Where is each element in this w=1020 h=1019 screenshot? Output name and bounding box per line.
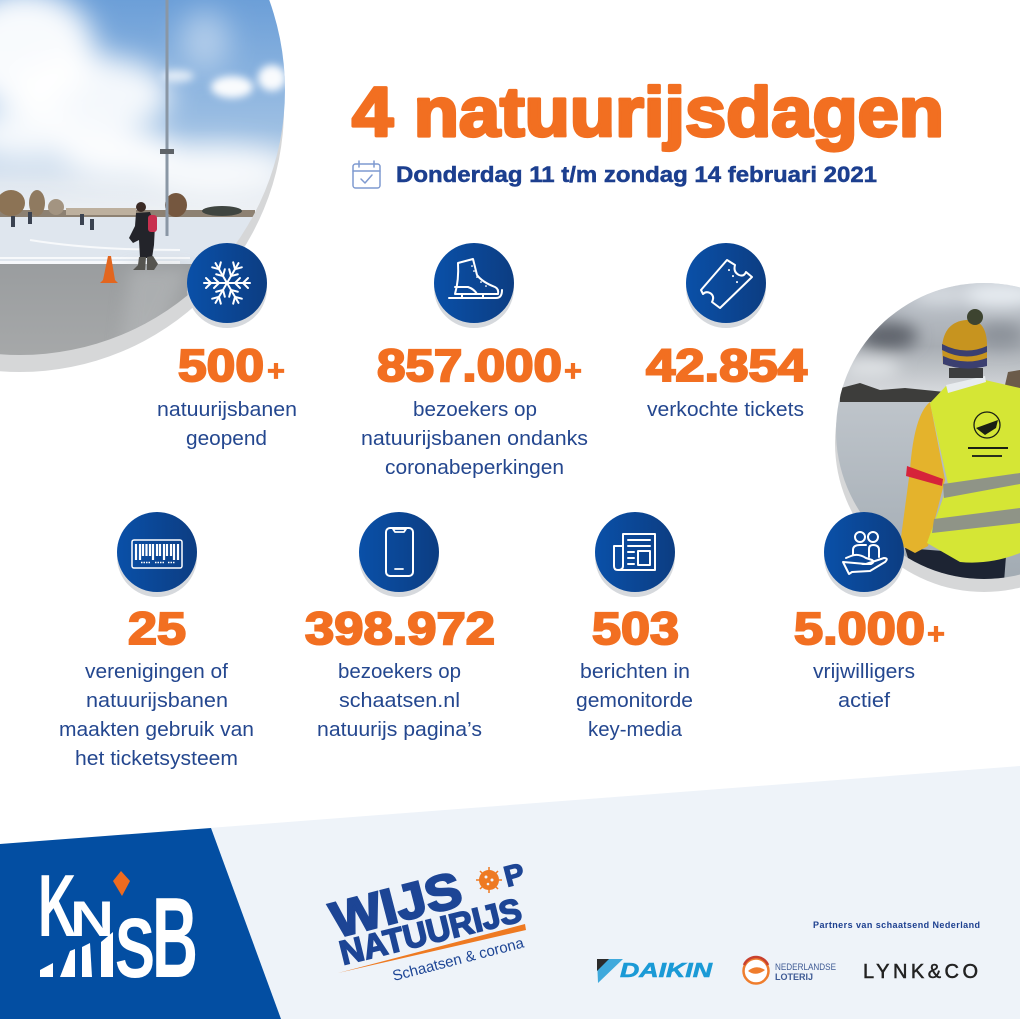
icon: smartphone xyxy=(386,528,413,576)
logo: Daikin: DAIKIN xyxy=(620,960,713,982)
stat: berichten key-media: gemonitorde xyxy=(576,690,693,712)
logo: Wijs op natuurijs: P xyxy=(501,858,528,894)
icon: snowflake xyxy=(204,262,250,304)
photo: skater on natural ice xyxy=(0,0,290,372)
stat: berichten key-media: 503 xyxy=(592,603,679,654)
stat: verkochte tickets: 42.854 xyxy=(646,340,807,391)
skaters in background xyxy=(11,212,94,230)
stat: schaatsen.nl bezoekers: 398.972 xyxy=(305,603,495,654)
stat: verkochte tickets xyxy=(646,243,807,421)
stat: natuurijsbanen geopend: natuurijsbanen xyxy=(157,399,297,421)
cone xyxy=(100,256,118,283)
icon: people in hand xyxy=(843,532,887,574)
stat: schaatsen.nl bezoekers: schaatsen.nl xyxy=(339,690,460,712)
stat: natuurijsbanen geopend: geopend xyxy=(186,428,267,450)
stat: schaatsen.nl bezoekers: bezoekers op xyxy=(338,661,461,683)
logo: Wijs op natuurijs: WIJS xyxy=(325,861,468,949)
stat: natuurijsbanen geopend: 500 xyxy=(178,340,264,391)
logo: KNSB: N xyxy=(70,891,114,947)
logo: Nederlandse Loterij: LOTERIJ xyxy=(775,972,813,983)
stat: verenigingen ticketsysteem: het ticketsysteem xyxy=(75,748,238,770)
stat: bezoekers op natuurijsbanen: + xyxy=(564,355,582,388)
stat: natuurijsbanen geopend xyxy=(157,243,297,450)
trousers xyxy=(905,548,1006,582)
footer blue panel with KNSB logo xyxy=(0,828,281,1019)
logo: KNSB: B xyxy=(152,875,198,1002)
footer background xyxy=(0,766,1020,1019)
stat: berichten key-media: berichten in xyxy=(580,661,690,683)
collar xyxy=(946,376,986,393)
stat: schaatsen.nl bezoekers xyxy=(305,512,495,741)
subtitle: dates: Donderdag 11 t/m zondag 14 februari 2021 xyxy=(396,162,877,187)
logo: Nederlandse Loterij: NEDERLANDSE xyxy=(775,962,836,973)
icon: calendar xyxy=(353,161,380,188)
logo: Nederlandse Loterij xyxy=(744,957,836,984)
stat: bezoekers op natuurijsbanen: 857.000 xyxy=(377,340,562,391)
stat: vrijwilligers: actief xyxy=(838,690,890,712)
icon: barcode xyxy=(132,540,182,568)
stat: verenigingen ticketsysteem: 25 xyxy=(128,603,186,654)
icon: ice skate xyxy=(449,259,502,298)
icon: ticket xyxy=(701,260,752,308)
logo: Daikin xyxy=(597,959,713,983)
stat: vrijwilligers xyxy=(794,512,945,712)
partners heading: Partners van schaatsend Nederland xyxy=(813,920,980,930)
stat: schaatsen.nl bezoekers: natuurijs pagina’s xyxy=(317,719,482,741)
stat: berichten key-media xyxy=(576,512,693,741)
logo: Wijs op natuurijs xyxy=(325,858,528,985)
title: 4 natuurijsdagen xyxy=(352,73,944,151)
logo: Lynk & Co: LYNK&CO xyxy=(863,961,978,983)
photo: volunteer in safety vest xyxy=(830,280,1020,598)
stat: berichten key-media: key-media xyxy=(588,719,683,741)
logo: KNSB: S xyxy=(115,901,155,995)
stat: verenigingen ticketsysteem: natuurijsbanen xyxy=(86,690,228,712)
stat: verenigingen ticketsysteem: maakten gebruik van xyxy=(59,719,254,741)
stat: verenigingen ticketsysteem xyxy=(59,512,254,770)
stat: verenigingen ticketsysteem: verenigingen of xyxy=(85,661,228,683)
stat: vrijwilligers: 5.000 xyxy=(794,603,925,654)
icon: virus xyxy=(476,867,502,893)
stat: verkochte tickets: verkochte tickets xyxy=(647,399,804,421)
hat xyxy=(942,320,987,368)
vest xyxy=(927,380,1020,563)
logo: Wijs op natuurijs: Schaatsen & corona xyxy=(391,934,526,985)
logo: KNSB xyxy=(38,856,198,1002)
stat: vrijwilligers: + xyxy=(927,618,945,651)
stat: bezoekers op natuurijsbanen xyxy=(361,243,588,479)
stat: bezoekers op natuurijsbanen: coronabeperkingen xyxy=(385,457,564,479)
stat: bezoekers op natuurijsbanen: natuurijsbanen ondanks xyxy=(361,428,588,450)
stat: natuurijsbanen geopend: + xyxy=(267,355,285,388)
stat: bezoekers op natuurijsbanen: bezoekers op xyxy=(413,399,537,421)
tree line xyxy=(0,190,255,217)
stat: vrijwilligers: vrijwilligers xyxy=(813,661,915,683)
sleeve xyxy=(900,402,945,553)
logo: KNSB: K xyxy=(38,856,76,955)
icon: newspaper xyxy=(614,534,655,570)
skater xyxy=(129,202,158,270)
logo: Wijs op natuurijs: NATUURIJS xyxy=(336,891,526,973)
